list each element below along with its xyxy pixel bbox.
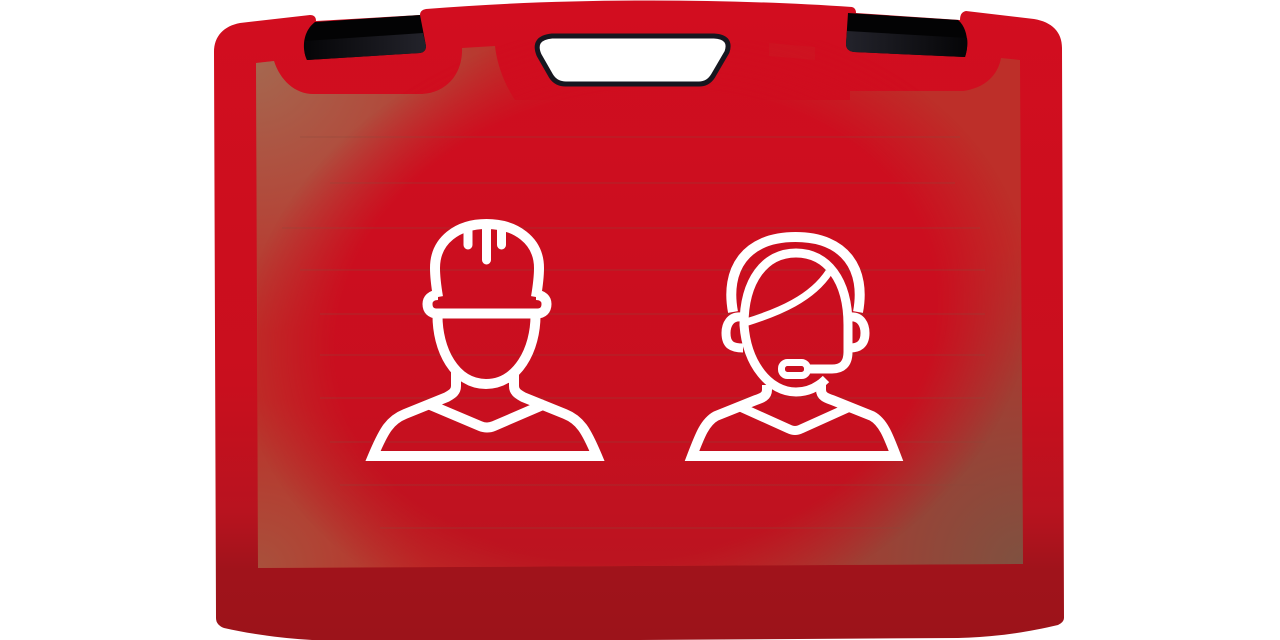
shirt collar	[738, 406, 852, 430]
hair fringe	[744, 272, 829, 323]
illustration: red carrying case	[214, 0, 1064, 640]
left ear	[726, 317, 743, 348]
face	[437, 314, 536, 384]
window panel	[256, 46, 1023, 568]
helmet dome	[435, 224, 539, 297]
right latch	[846, 13, 967, 57]
icon: support agent with headset	[692, 237, 896, 456]
microphone	[782, 362, 808, 376]
icon: construction worker	[373, 224, 597, 456]
right ear	[850, 317, 865, 348]
faint panel patch under handle	[769, 43, 815, 60]
case body	[214, 0, 1064, 640]
headband	[731, 237, 860, 312]
shoulders	[373, 372, 597, 456]
helmet ridges	[468, 226, 502, 260]
shoulders	[692, 385, 896, 456]
carry handle opening	[537, 36, 728, 84]
panel ribs	[282, 137, 985, 528]
helmet brim	[428, 295, 546, 314]
shirt collar	[428, 404, 545, 428]
left latch	[304, 15, 426, 60]
red centre glow	[258, 40, 1023, 568]
face outline	[744, 253, 848, 392]
